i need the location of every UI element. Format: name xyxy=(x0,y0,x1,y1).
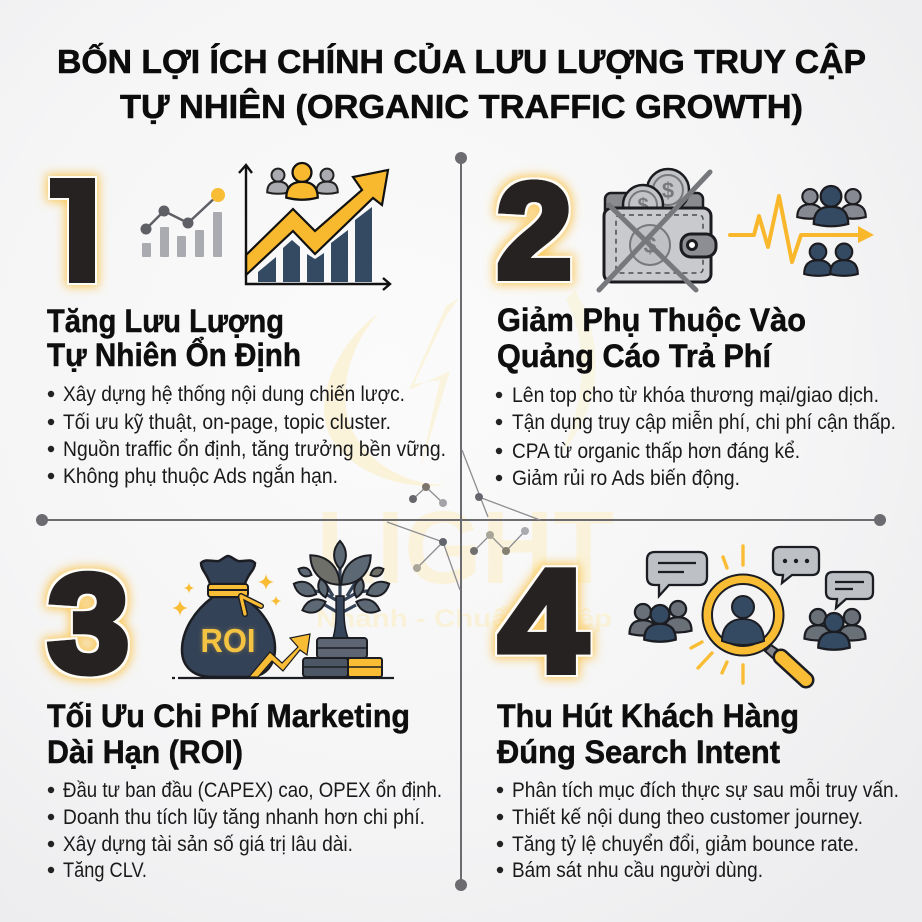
bullet list: Tối ưu kỹ thuật, on-page, topic cluster. xyxy=(63,411,391,434)
bullet list: Lên top cho từ khóa thương mại/giao dịch. xyxy=(512,384,879,407)
heading: Đúng Search Intent xyxy=(497,734,780,770)
panel 3: long-term marketing cost xyxy=(47,541,442,882)
icon: crossed-out wallet: $ xyxy=(644,232,657,258)
watermark slogan: Nhanh - Chuẩn - Tiệp xyxy=(316,605,612,633)
icon: small line and bar chart xyxy=(140,188,225,257)
heading xyxy=(497,302,806,374)
number 1 xyxy=(38,166,108,296)
bullet list: Không phụ thuộc Ads ngắn hạn. xyxy=(63,465,338,488)
title: TỰ NHIÊN (ORGANIC TRAFFIC GROWTH) xyxy=(120,88,803,125)
bullet list: Đầu tư ban đầu (CAPEX) cao, OPEX ổn định. xyxy=(63,779,442,802)
icon: right chat bubble and audience xyxy=(804,572,873,650)
heading xyxy=(47,698,410,770)
bullet list: Tăng CLV. xyxy=(63,859,147,882)
icon: left chat bubble and audience xyxy=(630,552,707,642)
icon: ROI money bag xyxy=(172,556,281,677)
bullet list: Doanh thu tích lũy tăng nhanh hơn chi phí. xyxy=(63,806,425,829)
network nodes xyxy=(387,450,540,590)
bullet list: Tận dụng truy cập miễn phí, chi phí cận thấp. xyxy=(512,411,896,434)
icon: pulse arrow xyxy=(730,196,874,262)
heading: Tăng Lưu Lượng xyxy=(47,303,284,339)
icon: crossed-out wallet: $ xyxy=(662,178,674,203)
bullet list: Nguồn traffic ổn định, tăng trưởng bền vững. xyxy=(63,438,446,461)
icon: growth chart with audience xyxy=(239,163,390,290)
title: BỐN LỢI ÍCH CHÍNH CỦA LƯU LƯỢNG TRUY CẬP xyxy=(57,42,866,80)
heading: Thu Hút Khách Hàng xyxy=(497,698,799,734)
icon: yellow growth arrow xyxy=(249,634,310,677)
bullet list xyxy=(497,779,899,882)
watermark wordmark: LIGHT xyxy=(316,490,614,605)
bullet list: Giảm rủi ro Ads biến động. xyxy=(512,467,740,490)
bullet list: Xây dựng hệ thống nội dung chiến lược. xyxy=(63,383,405,406)
bullet list: Xây dựng tài sản số giá trị lâu dài. xyxy=(63,833,353,856)
number 4: 4 xyxy=(499,540,587,702)
panel 4: attract customers with search intent xyxy=(497,540,899,882)
heading: Tối Ưu Chi Phí Marketing xyxy=(47,698,410,734)
icon: crossed-out wallet: $ xyxy=(637,195,649,217)
divider cross xyxy=(36,152,886,891)
panel 1: stable organic traffic xyxy=(40,151,446,488)
icon: top-right chat bubble xyxy=(773,547,819,583)
heading: Tự Nhiên Ổn Định xyxy=(47,337,301,373)
heading: Dài Hạn (ROI) xyxy=(47,734,243,770)
icon: stack of coins xyxy=(303,638,382,677)
ground line xyxy=(172,677,394,679)
bullet list xyxy=(48,383,446,488)
bullet list: CPA từ organic thấp hơn đáng kể. xyxy=(512,440,800,463)
bullet list: Bám sát nhu cầu người dùng. xyxy=(512,859,763,882)
watermark logo xyxy=(324,290,596,486)
heading: Giảm Phụ Thuộc Vào xyxy=(497,302,806,338)
heading xyxy=(47,303,301,373)
number 3: 3 xyxy=(48,547,129,701)
icon: magnifier over person xyxy=(691,546,806,683)
icon: crossed-out wallet xyxy=(599,169,716,290)
number 1: 1 xyxy=(40,151,121,314)
title xyxy=(57,42,866,125)
bullet list: Thiết kế nội dung theo customer journey. xyxy=(512,806,863,829)
heading: Quảng Cáo Trả Phí xyxy=(497,338,772,374)
bullet list xyxy=(48,779,442,882)
bullet list: Tăng tỷ lệ chuyển đổi, giảm bounce rate. xyxy=(512,833,859,856)
bullet list xyxy=(496,384,896,490)
icon: ROI money bag: ROI xyxy=(200,622,256,659)
number 2: 2 xyxy=(497,157,572,306)
icon: audience group xyxy=(797,186,866,276)
icon: money tree xyxy=(291,541,392,638)
heading xyxy=(497,698,799,770)
panel 2: less dependence on paid ads xyxy=(496,157,896,490)
